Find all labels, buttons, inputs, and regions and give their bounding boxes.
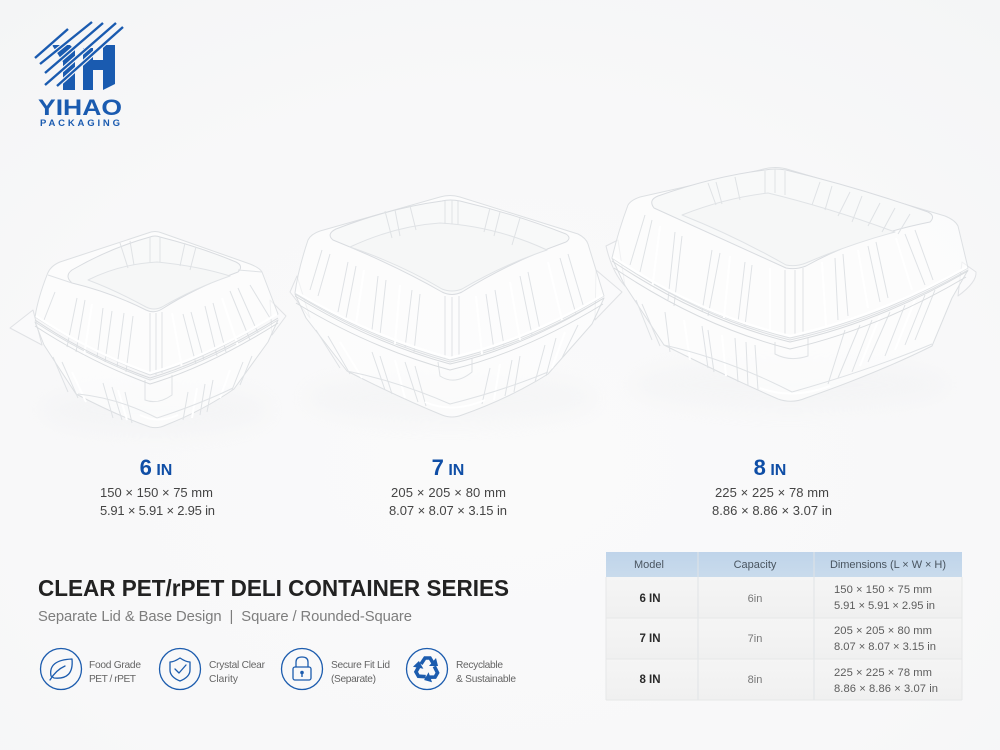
feature: crystal clear (160, 648, 266, 690)
icon: padlock (282, 648, 322, 690)
table header: Dimensions (L × W × H) (830, 559, 946, 571)
feature text: (Separate) (331, 674, 376, 685)
logo tagline: PACKAGING (40, 118, 120, 129)
table row: 8 IN: 8in (748, 674, 762, 686)
icon: leaf (40, 648, 82, 690)
feature: recyclable (406, 648, 516, 690)
feature text: Crystal Clear (209, 660, 266, 671)
model name 8 IN: 8 IN (754, 455, 786, 480)
table row: 6 IN (606, 577, 962, 618)
feature text: Secure Fit Lid (331, 660, 390, 671)
table row: 7 IN: 8.07 × 8.07 × 3.15 in (834, 641, 936, 653)
metric dimensions: 225 × 225 × 78 mm (715, 485, 829, 500)
imperial dimensions: 8.86 × 8.86 × 3.07 in (712, 503, 832, 518)
size label: 7 IN (389, 455, 507, 518)
icon: recycling arrows (406, 648, 448, 690)
logo mark: YH monogram with stripes (35, 22, 123, 90)
model name 7 IN: 7 IN (432, 455, 464, 480)
table row: 7 IN: 7 IN (639, 633, 661, 645)
table row: 8 IN: 8 IN (639, 674, 661, 686)
logo wordmark: YIHAO (38, 95, 122, 120)
model name 6 IN: 6 IN (140, 455, 172, 480)
feature text: Food Grade (89, 660, 141, 671)
imperial dimensions: 8.07 × 8.07 × 3.15 in (389, 503, 507, 518)
metric dimensions: 150 × 150 × 75 mm (100, 485, 213, 500)
table row: 6 IN: 150 × 150 × 75 mm (834, 584, 932, 596)
table row: 7 IN: 7in (748, 633, 762, 645)
subtitle: Separate Lid & Base Design | Square / Rounded-Square (38, 609, 412, 625)
table row: 6 IN: 5.91 × 5.91 × 2.95 in (834, 600, 935, 612)
imperial dimensions: 5.91 × 5.91 × 2.95 in (100, 503, 215, 518)
feature text: PET / rPET (89, 674, 136, 685)
container: 8 inch (606, 168, 976, 411)
feature: secure fit lid (282, 648, 390, 690)
feature text: Recyclable (456, 660, 503, 671)
feature: food grade (40, 648, 141, 690)
feature row (40, 648, 516, 690)
table row: 8 IN (606, 659, 962, 700)
table row: 6 IN: 6 IN (639, 593, 661, 605)
table header (606, 552, 962, 577)
container: 6 inch (10, 232, 286, 436)
size label: 8 IN (712, 455, 832, 518)
table row: 8 IN: 225 × 225 × 78 mm (834, 667, 932, 679)
table row: 7 IN (606, 618, 962, 659)
size label: 6 IN (100, 455, 215, 518)
logo: Yihao Packaging (35, 22, 123, 129)
icon: shield check (160, 648, 200, 690)
table header: Model (634, 559, 664, 571)
feature text: & Sustainable (456, 674, 516, 685)
container: 7 inch (290, 196, 622, 424)
table row: 7 IN: 205 × 205 × 80 mm (834, 625, 932, 637)
metric dimensions: 205 × 205 × 80 mm (391, 485, 506, 500)
title: CLEAR PET/rPET DELI CONTAINER SERIES (38, 575, 509, 601)
table row: 8 IN: 8.86 × 8.86 × 3.07 in (834, 683, 938, 695)
specification table (606, 552, 962, 700)
table row: 6 IN: 6in (748, 593, 762, 605)
table header: Capacity (734, 559, 777, 571)
feature text: Clarity (209, 674, 239, 685)
